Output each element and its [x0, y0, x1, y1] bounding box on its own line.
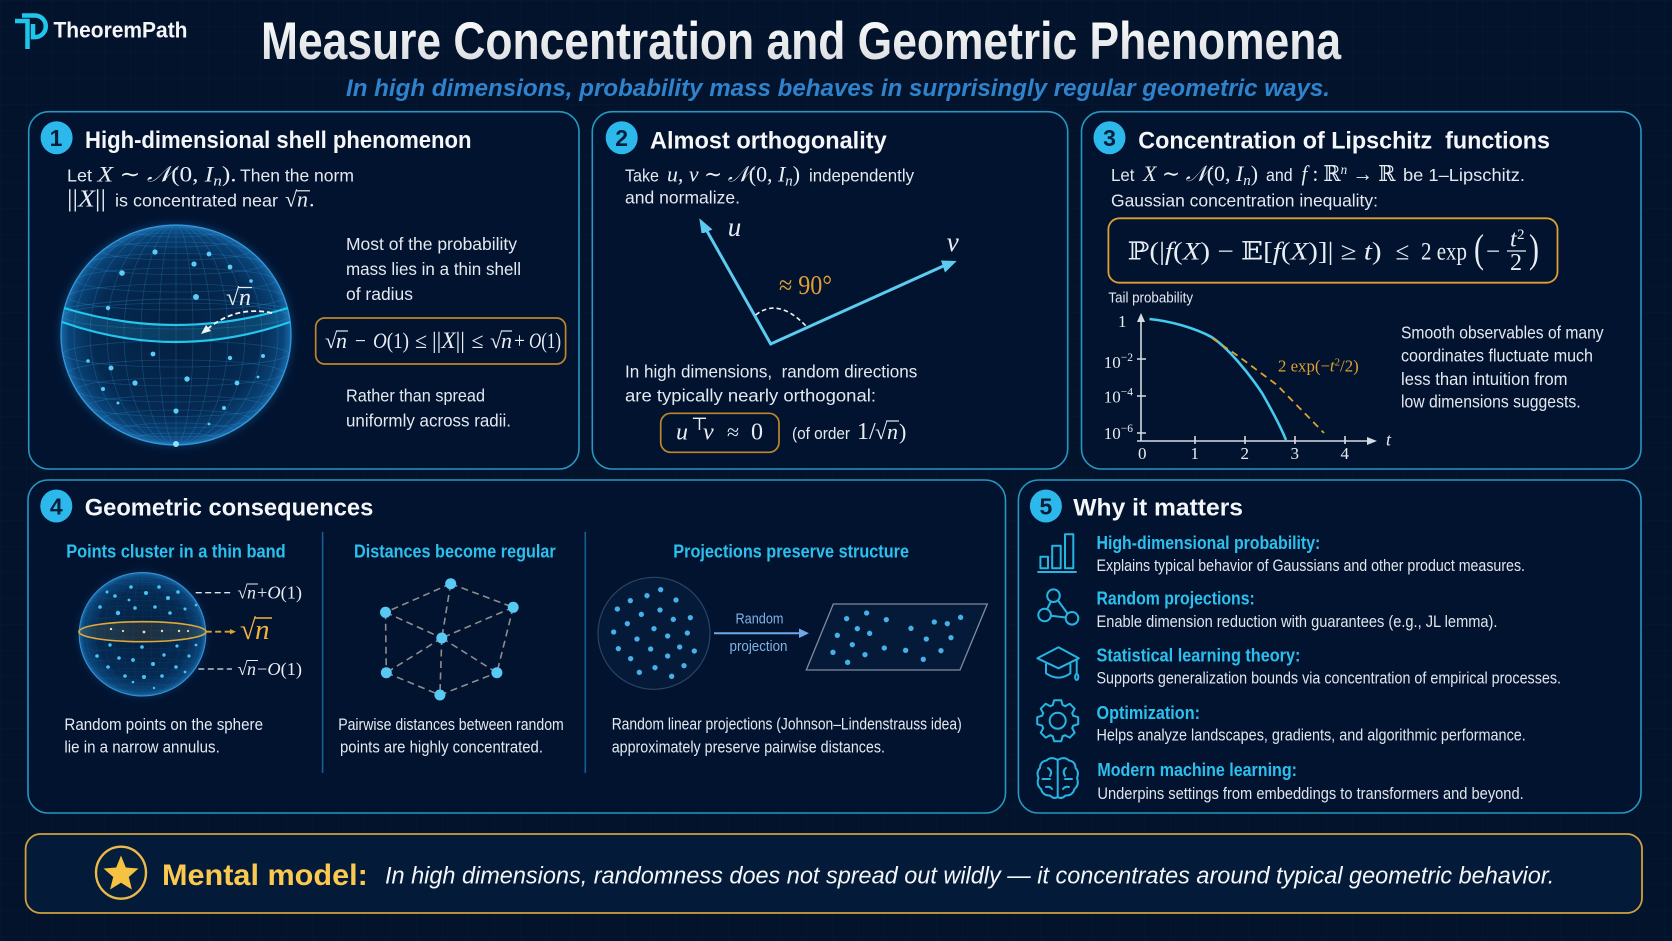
distance graph [380, 578, 519, 700]
item: high-dimensional probability [1037, 533, 1525, 575]
intro text: is concentrated near [115, 191, 278, 211]
formula box: shell bound: n [336, 328, 347, 353]
item: random projections: Enable dimension reduction with guarantees (e.g., JL lemma). [1096, 613, 1498, 631]
shell closing text [346, 386, 511, 431]
formula box: shell bound: ≤ [415, 328, 427, 353]
item: random projections: Random projections: [1096, 588, 1255, 608]
intro text: n [213, 174, 222, 190]
axis labels: t [1386, 430, 1392, 450]
axis labels: −4 [1121, 387, 1133, 399]
sphere radius labels: +O(1) [257, 582, 302, 603]
axis labels: 0 [1138, 444, 1146, 463]
intro text [67, 162, 354, 213]
caption: Pairwise distances between random [338, 716, 564, 734]
formula box: inner product: u [676, 419, 688, 445]
intro text 2: u, v ∼ 𝒩(0, I [667, 162, 785, 187]
intro text 3: X ∼ 𝒩(0, I [1143, 161, 1243, 186]
panel 4: geometric consequences [28, 480, 1006, 813]
order note: n [887, 419, 898, 444]
formula box: shell bound: − [355, 328, 366, 353]
item: high-dimensional probability: High-dimensional probability: [1096, 533, 1320, 553]
projection arrow [714, 612, 809, 655]
icon: brain [1038, 758, 1078, 798]
caption: points are highly concentrated. [340, 739, 543, 757]
heading 5: Why it matters [1073, 495, 1243, 522]
axis labels: 10 [1104, 388, 1121, 407]
icon: star [96, 847, 146, 899]
intro text: Let [67, 166, 92, 186]
caption: approximately preserve pairwise distances. [612, 739, 885, 757]
order note [792, 419, 906, 445]
icon: graduation cap [1037, 647, 1079, 680]
intro text: n [297, 187, 308, 212]
formula box: inner product: ⊤ [691, 414, 708, 434]
sphere radius labels: √ [240, 614, 256, 646]
chart title: Tail probability [1108, 289, 1193, 306]
icon: network nodes [1038, 589, 1078, 625]
badge 3 [1094, 121, 1126, 154]
intro text: √ [285, 187, 298, 212]
panel 3: concentration of Lipschitz functions [1082, 112, 1641, 469]
logo: TheoremPath [15, 16, 188, 49]
shell description text [346, 234, 521, 304]
item: optimization: Optimization: [1096, 703, 1200, 723]
intro text: ||X|| [67, 187, 106, 213]
bound curve [1212, 338, 1324, 433]
formula box: Gaussian concentration: ) [1529, 226, 1539, 271]
heading 4: Geometric consequences [85, 495, 373, 522]
order note: (of order [792, 425, 850, 443]
shell closing text: uniformly across radii. [346, 411, 511, 431]
intro text 3: Let [1111, 165, 1135, 185]
heading 3: Concentration of Lipschitz functions [1138, 128, 1550, 154]
formula box: Gaussian concentration: ( [1474, 226, 1484, 271]
intro text 2: independently [809, 166, 914, 186]
logo: TheoremPath: TheoremPath [54, 18, 188, 43]
caption: Random linear projections (Johnson–Lindenstrauss idea) [612, 715, 962, 733]
bound label: 2 exp(−t [1278, 357, 1335, 376]
subheading: Projections preserve structure [673, 540, 909, 561]
column: distances become regular [338, 541, 564, 757]
formula box: inner product: ≈ [727, 419, 739, 444]
projection arrow: Random [736, 612, 784, 628]
formula box: Gaussian concentration: 2 [1517, 227, 1524, 243]
sphere radius labels: n [255, 614, 270, 646]
intro text 3 [1111, 161, 1525, 211]
point cloud circle [598, 577, 710, 689]
formula box: shell bound: ||X|| [432, 328, 465, 353]
intro text: . [309, 187, 314, 212]
column: points cluster in a thin band [64, 541, 302, 757]
sphere illustration: n [239, 285, 251, 311]
panel 2: almost orthogonality [592, 112, 1068, 469]
axis labels [1104, 312, 1392, 463]
chart description: less than intuition from [1401, 369, 1568, 389]
formula box: inner product: 0 [751, 419, 763, 445]
formula box: shell bound: O(1) [529, 328, 561, 353]
intro text 2: Take [625, 166, 659, 186]
icon: gear [1037, 700, 1078, 741]
vector diagram [699, 212, 959, 344]
item: optimization [1037, 700, 1526, 745]
axis labels: 1 [1118, 312, 1126, 331]
sphere radius labels [196, 582, 302, 680]
caption [612, 715, 962, 757]
icon: bar chart [1037, 534, 1077, 572]
heading 1: High-dimensional shell phenomenon [85, 127, 472, 154]
bound label: /2) [1340, 357, 1359, 376]
banner label: Mental model: [162, 859, 368, 892]
projection arrow: projection [730, 639, 788, 655]
intro text 3: be 1–Lipschitz. [1403, 165, 1525, 185]
order note: √ [875, 419, 888, 444]
orthogonality text: are typically nearly orthogonal: [625, 386, 876, 406]
chart description: coordinates fluctuate much [1401, 346, 1593, 366]
shell description text: Most of the probability [346, 234, 517, 254]
subheading: Points cluster in a thin band [66, 541, 286, 562]
caption: lie in a narrow annulus. [64, 739, 220, 757]
intro text 3: and [1266, 165, 1293, 185]
panel 5: why it matters [1018, 480, 1641, 813]
chart description: low dimensions suggests. [1401, 392, 1581, 412]
orthogonality text [625, 361, 918, 406]
shell description text: of radius [346, 284, 413, 304]
vector diagram: u [728, 212, 741, 242]
axis labels: 2 [1240, 444, 1249, 463]
intro text 3: ) [1251, 161, 1258, 186]
formula box: shell bound: + [514, 328, 525, 353]
axis labels: −2 [1121, 352, 1133, 364]
column: projections preserve structure [598, 540, 987, 757]
vector diagram: v [947, 227, 959, 257]
intro text 2: ) [793, 162, 800, 187]
sphere illustration: √ [226, 285, 240, 311]
formula box: Gaussian concentration: ≤ [1396, 238, 1409, 265]
badge 4 [40, 490, 72, 522]
heading 2: Almost orthogonality [650, 128, 887, 154]
axis labels: 4 [1340, 444, 1350, 463]
title: Measure Concentration and Geometric Phenomena [261, 12, 1341, 71]
intro text 3: Gaussian concentration inequality: [1111, 191, 1378, 211]
formula box: Gaussian concentration [1108, 218, 1558, 283]
sphere radius labels: n [247, 659, 256, 679]
axis labels: 3 [1290, 444, 1299, 463]
item: modern machine learning: Modern machine learning: [1097, 760, 1297, 780]
subheading: Distances become regular [354, 541, 556, 562]
small sphere with band [78, 571, 207, 697]
formula box: shell bound: √ [325, 328, 338, 353]
intro text 3: n [1243, 173, 1251, 189]
tail probability chart [1104, 289, 1392, 463]
formula box: shell bound: n [501, 328, 512, 353]
orthogonality text: In high dimensions, random directions [625, 361, 918, 381]
projection plane [806, 604, 987, 670]
item: statistical learning theory: Statistical learning theory: [1096, 646, 1300, 666]
badge 1 [41, 121, 73, 154]
item: modern machine learning [1038, 758, 1524, 803]
formula box: Gaussian concentration: − [1486, 238, 1500, 265]
bound label: 2 [1335, 357, 1340, 369]
intro text 3: f : ℝ [1302, 161, 1343, 186]
banner: mental model [26, 834, 1642, 913]
subtitle: In high dimensions, probability mass behaves in surprisingly regular geometric ways. [346, 75, 1330, 102]
caption [64, 716, 263, 757]
badge 3: 3 [1103, 125, 1116, 151]
sphere illustration [59, 223, 293, 447]
shell description text: mass lies in a thin shell [346, 259, 521, 279]
intro text 3: → ℝ [1347, 161, 1396, 186]
shell closing text: Rather than spread [346, 386, 485, 406]
intro text: X ∼ 𝒩(0, I [98, 162, 212, 187]
intro text 2 [625, 162, 914, 208]
sphere radius labels: −O(1) [257, 659, 302, 680]
item: high-dimensional probability: Explains typical behavior of Gaussians and other product measures. [1096, 557, 1525, 575]
formula box: shell bound: O(1) [373, 328, 409, 353]
intro text 3: n [1341, 163, 1347, 178]
intro text 2: and normalize. [625, 188, 740, 208]
axis labels: 10 [1104, 353, 1121, 372]
order note: 1/ [857, 419, 876, 445]
axis labels: −6 [1121, 423, 1133, 435]
formula box: Gaussian concentration: t [1510, 227, 1518, 253]
vector diagram: ≈ 90° [779, 270, 832, 300]
intro text: ). [222, 162, 237, 187]
badge 1: 1 [50, 125, 63, 151]
order note: ) [899, 419, 906, 444]
badge 2 [606, 121, 638, 154]
intro text: Then the norm [240, 166, 354, 186]
badge 5: 5 [1040, 494, 1053, 520]
item: modern machine learning: Underpins settings from embeddings to transformers and beyond. [1097, 785, 1524, 803]
item: random projections [1038, 588, 1498, 631]
axis labels: 1 [1190, 444, 1199, 463]
formula box: Gaussian concentration: 2 [1510, 250, 1522, 276]
chart description [1401, 322, 1604, 412]
sphere radius labels: √ [238, 659, 248, 679]
badge 4: 4 [50, 494, 63, 520]
intro text 2: n [785, 174, 793, 190]
item: statistical learning theory: Supports generalization bounds via concentration of empirical processes. [1096, 670, 1561, 688]
sphere radius labels: n [247, 582, 256, 602]
banner statement: In high dimensions, randomness does not spread out wildly — it concentrates around typical geometric behavior. [385, 862, 1554, 890]
formula box: Gaussian concentration: 2 exp [1421, 238, 1467, 265]
chart description: Smooth observables of many [1401, 322, 1604, 342]
formula box: shell bound: √ [490, 328, 503, 353]
badge 5 [1030, 490, 1062, 522]
badge 2: 2 [615, 125, 628, 151]
formula box: Gaussian concentration: ℙ(|f(X) − 𝔼[ f(X)]| ≥ t) [1128, 238, 1382, 265]
formula box: shell bound: ≤ [472, 328, 484, 353]
formula box: shell bound [316, 318, 566, 364]
caption [338, 716, 564, 757]
formula box: inner product: v [703, 419, 714, 445]
sphere radius labels: √ [238, 582, 248, 602]
item: statistical learning theory [1037, 646, 1561, 688]
item: optimization: Helps analyze landscapes, gradients, and algorithmic performance. [1096, 727, 1526, 745]
axis labels: 10 [1104, 424, 1121, 443]
axes [1137, 318, 1370, 444]
caption: Random points on the sphere [64, 716, 263, 734]
formula box: inner product [661, 413, 779, 452]
panel 1: high-dimensional shell phenomenon [29, 112, 579, 469]
tail curve [1150, 319, 1286, 440]
